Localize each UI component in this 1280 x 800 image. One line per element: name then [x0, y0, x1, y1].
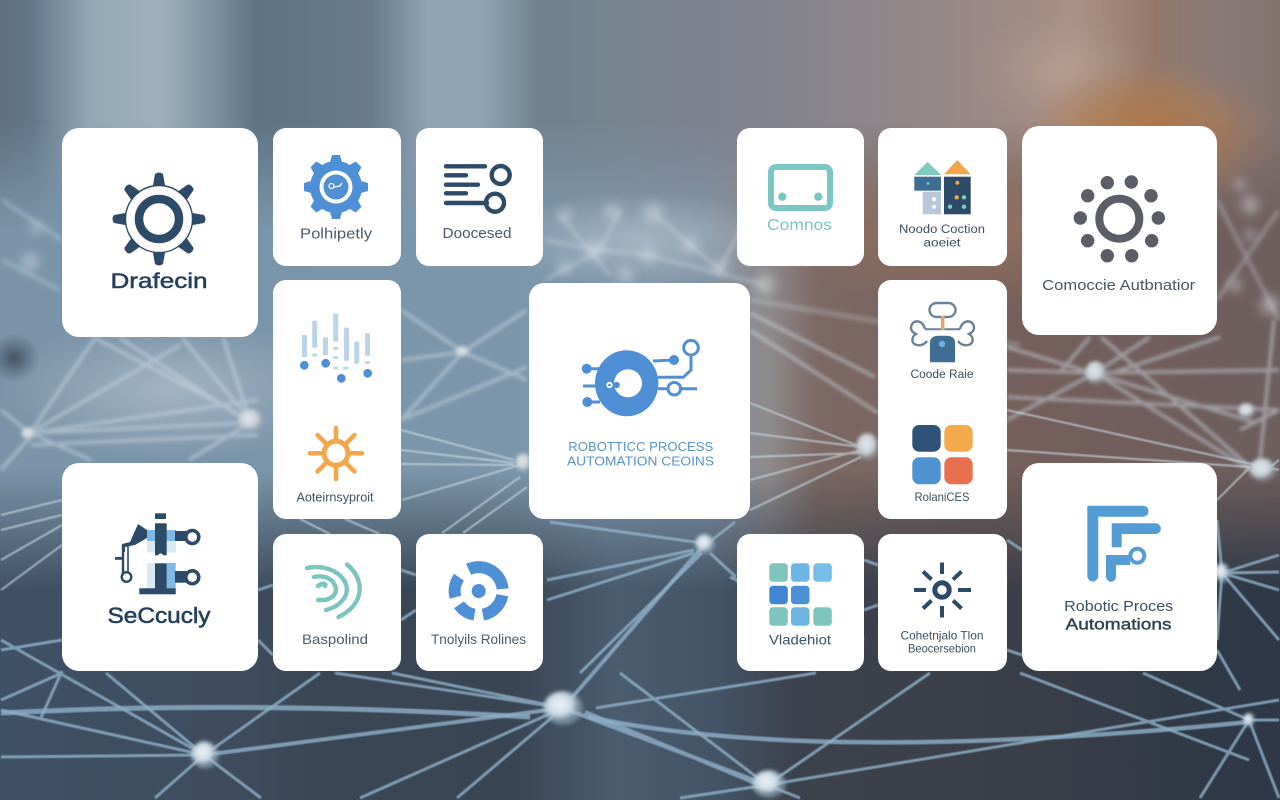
label: Noodo Coction [899, 224, 985, 250]
icon: segmented ring [455, 567, 503, 615]
card: Robotic Proces Automations [1022, 463, 1217, 671]
icon: robot arm [115, 513, 199, 594]
label: Baspolind: Baspolind [302, 631, 368, 647]
icon: teal device [771, 167, 830, 208]
card: Drafecin [62, 128, 258, 337]
label: Cohetnjalo Tlon [900, 628, 984, 656]
label: Robotic Proces Automations: Automations [1066, 616, 1172, 634]
card: Comnos [737, 128, 864, 266]
label: Noodo Coction: aoeiet [924, 238, 961, 250]
icon: buildings [914, 160, 971, 214]
card: SeCcucly [62, 463, 258, 671]
icon: bars and dots chart [300, 314, 372, 383]
label: Comoccie Autbnatior: Comoccie Autbnatior [1042, 277, 1195, 294]
label: Robotic Process Automation [567, 439, 714, 468]
icon: blue gear [304, 155, 368, 219]
card: Tnolyils Rolines [416, 534, 543, 671]
label: Doocesed: Doocesed [442, 226, 512, 242]
label: Comnos: Comnos [767, 217, 832, 234]
label: Tnolyils Rolines: Tnolyils Rolines [431, 631, 526, 647]
label: Robotic Process Automation: ROBOTTICC PROCESS [568, 439, 714, 454]
card: Polhipetly [273, 128, 401, 266]
label: Cohetnjalo Tlon: Beocersebion [908, 642, 976, 656]
card: Comoccie Autbnatior [1022, 126, 1217, 335]
icon: robot with bones [911, 303, 974, 362]
card: Baspolind [273, 534, 401, 671]
label: Coode Raie: Coode Raie [910, 369, 974, 381]
card: Noodo Coction [878, 128, 1007, 266]
icon: teal signal arcs [307, 564, 360, 617]
icon: orange sun [310, 428, 362, 479]
card: tall card left [273, 280, 401, 519]
label: Robotic Proces Automations: Robotic Proces [1064, 598, 1173, 615]
icon: blue F circuit [1087, 506, 1161, 582]
icon: lines and nodes [446, 166, 510, 212]
card: tall card right [878, 280, 1007, 519]
label: Robotic Process Automation: AUTOMATION CEOINS [567, 454, 714, 468]
card: central Robotic Process Automation [529, 283, 750, 519]
label: Aoteirnsyproit: Aoteirnsyproit [296, 490, 374, 505]
label: Cohetnjalo Tlon: Cohetnjalo Tlon [900, 628, 984, 642]
card: Vladehiot [737, 534, 864, 671]
icon: blue circuit ring [582, 340, 698, 416]
label: Noodo Coction: Noodo Coction [899, 224, 985, 236]
icon: four colour squares [912, 425, 973, 484]
label: Polhipetly: Polhipetly [300, 226, 373, 242]
label: Vladehiot: Vladehiot [769, 631, 831, 647]
label: Drafecin: Drafecin [110, 270, 208, 293]
icon: tile grid [769, 563, 832, 626]
card: Cohetnjalo Tlon [878, 534, 1007, 671]
label: Robotic Proces Automations [1064, 598, 1173, 634]
icon: ring with dots [1074, 175, 1165, 262]
label: SeCcucly: SeCcucly [108, 603, 210, 628]
label: RolaniCES: RolaniCES [914, 490, 970, 504]
icon: dark gear [112, 172, 206, 266]
icon: dark sun [914, 562, 971, 618]
card: Doocesed [416, 128, 543, 266]
